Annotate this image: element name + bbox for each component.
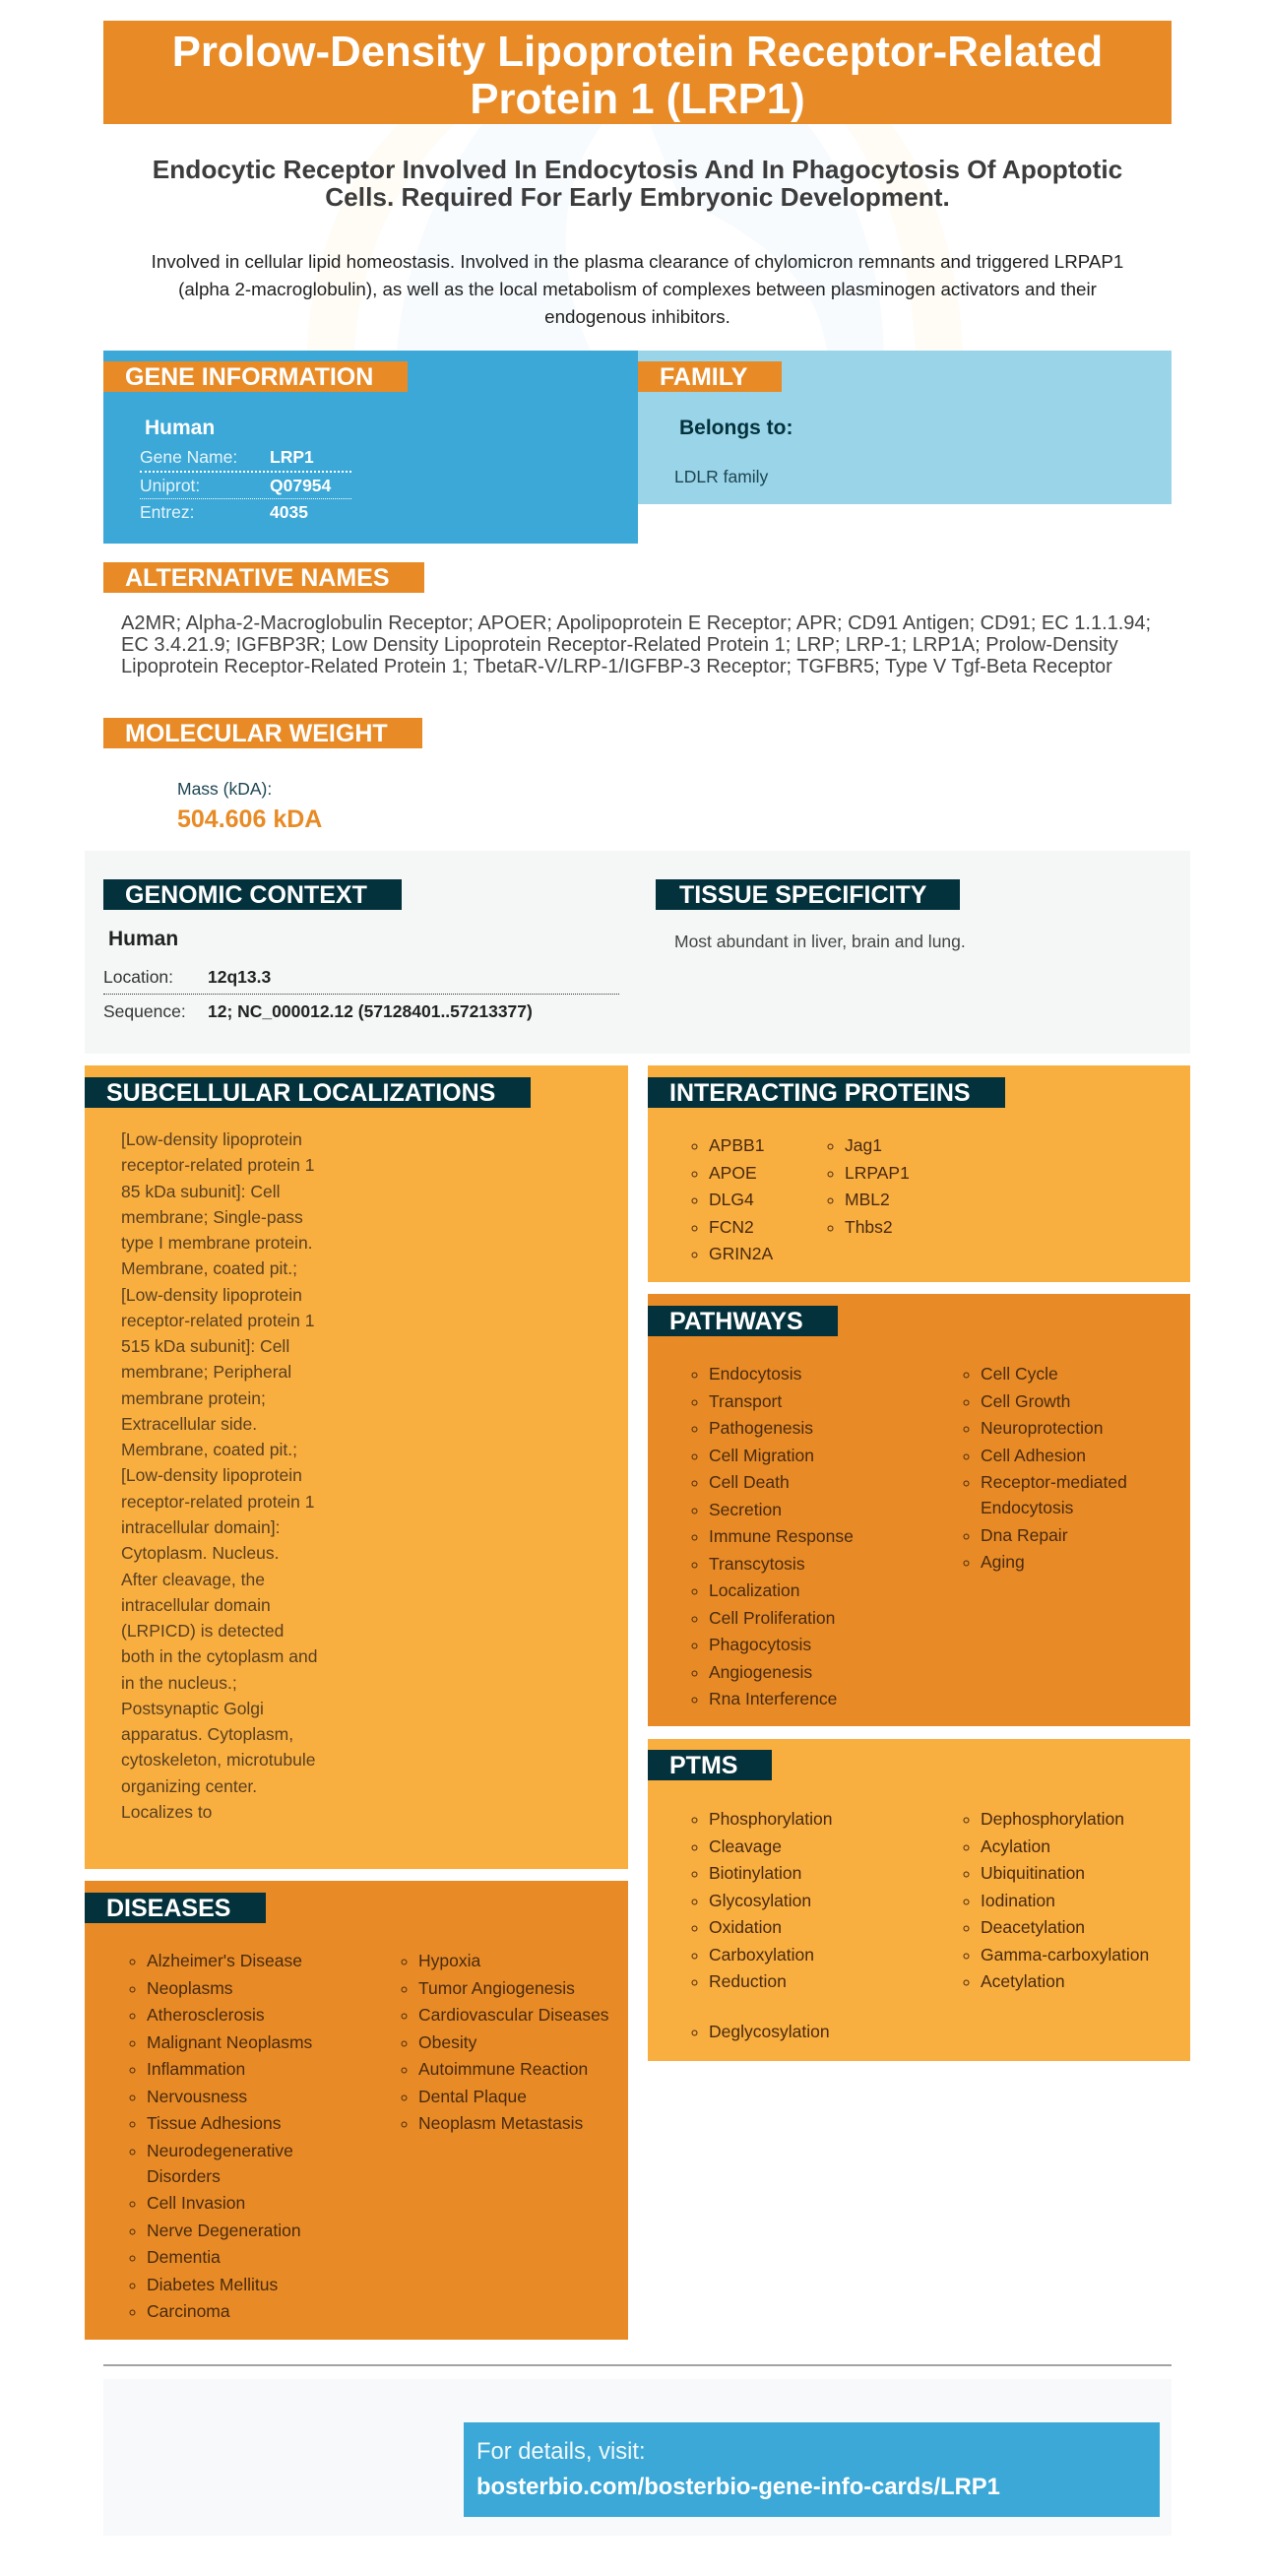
panel: pathways: [648, 1294, 1190, 1726]
pathway list column 1: Endocytosis: [709, 1364, 801, 1384]
protein list column 2: Thbs2: [845, 1217, 893, 1237]
localization text: Membrane, coated pit.;: [121, 1258, 297, 1278]
disease list column 1: Inflammation: [147, 2059, 245, 2079]
sequence value: 12; NC_000012.12 (57128401..57213377): [208, 1001, 533, 1021]
panel: genomic context and tissue specificity: [85, 851, 1190, 1054]
pathway list column 1: Secretion: [709, 1499, 782, 1518]
localization text: receptor-related protein 1: [121, 1155, 315, 1175]
ptm list column 1: Cleavage: [709, 1835, 782, 1855]
disease list column 1: Nervousness: [147, 2086, 247, 2105]
pathway list column 1: Localization: [709, 1580, 799, 1600]
pathway list column 2: Receptor-mediated: [981, 1472, 1127, 1492]
localization text: in the nucleus.;: [121, 1673, 237, 1693]
ptm list column 1: Reduction: [709, 1971, 787, 1991]
family value: LDLR family: [674, 467, 768, 486]
species label: Human: [145, 417, 215, 439]
species label: Human: [108, 928, 178, 950]
localization text: [Low-density lipoprotein: [121, 1285, 302, 1305]
ptm list column 2: Acetylation: [981, 1971, 1065, 1991]
disease list column 2: Obesity: [418, 2032, 476, 2052]
protein list column 2: MBL2: [845, 1190, 890, 1209]
description: Involved in cellular lipid homeostasis. Involved in the plasma clearance of chylomicron remnants and triggered LRPAP1: [152, 251, 1123, 272]
localization text: apparatus. Cytoplasm,: [121, 1724, 293, 1744]
alternative names text: [121, 612, 1151, 677]
localization text: membrane; Single-pass: [121, 1207, 303, 1227]
localization text: receptor-related protein 1: [121, 1311, 315, 1330]
pathway list column 1: Pathogenesis: [709, 1418, 813, 1438]
protein list column 2: Jag1: [845, 1135, 882, 1155]
ptm list column 1: Glycosylation: [709, 1891, 811, 1910]
entrez label: Entrez:: [140, 502, 194, 522]
localization text: intracellular domain: [121, 1595, 271, 1615]
subtitle: [153, 155, 1122, 212]
disease list column 2: Neoplasm Metastasis: [418, 2113, 583, 2133]
panel: interacting proteins: [648, 1065, 1190, 1282]
heading: ptms: [648, 1750, 772, 1780]
localization text: Localizes to: [121, 1802, 212, 1822]
panel: diseases: [85, 1881, 628, 2340]
localization text: organizing center.: [121, 1776, 257, 1796]
disease list column 1: Neoplasms: [147, 1977, 233, 1997]
title banner: Protein 1 (LRP1): [470, 75, 805, 123]
protein list column 2: [827, 1135, 910, 1237]
pathway list column 1: Immune Response: [709, 1526, 854, 1546]
ptm list column 1: Deglycosylation: [709, 2022, 830, 2041]
description: endogenous inhibitors.: [544, 306, 730, 327]
protein list column 1: DLG4: [709, 1190, 754, 1209]
disease list column 2: Cardiovascular Diseases: [418, 2005, 609, 2025]
alternative names text: A2MR; Alpha-2-Macroglobulin Receptor; APOER; Apolipoprotein E Receptor; APR; CD91 Antigen; CD91; EC 1.1.1.94;: [121, 612, 1151, 634]
heading: family: FAMILY: [660, 363, 747, 391]
disease list column 2: Hypoxia: [418, 1951, 480, 1970]
subtitle: Cells. Required For Early Embryonic Development.: [325, 182, 950, 212]
protein list column 1: APOE: [709, 1162, 757, 1182]
heading: pathways: PATHWAYS: [669, 1308, 803, 1335]
pathway list column 2: Aging: [981, 1552, 1025, 1572]
callout: details link: [464, 2422, 1160, 2517]
disease list column 1: Atherosclerosis: [147, 2005, 265, 2025]
protein list column 1: [691, 1135, 774, 1263]
localization text: Postsynaptic Golgi: [121, 1699, 264, 1718]
disease list column 2: [402, 1951, 609, 2133]
localization text: membrane protein;: [121, 1388, 266, 1408]
mass value: 504.606 kDA: [177, 805, 322, 833]
ptm list column 2: Ubiquitination: [981, 1863, 1085, 1883]
background watermark logo: [307, 124, 963, 351]
mass label: Mass (kDA):: [177, 779, 272, 799]
disease list column 2: Autoimmune Reaction: [418, 2059, 588, 2079]
ptm list column 1: Phosphorylation: [709, 1809, 833, 1829]
heading: molecular weight: MOLECULAR WEIGHT: [125, 720, 388, 747]
panel: family: [638, 351, 1172, 504]
entrez value: 4035: [270, 502, 308, 522]
ptm list column 2: Acylation: [981, 1835, 1050, 1855]
heading: diseases: DISEASES: [106, 1895, 230, 1922]
heading: pathways: [648, 1306, 838, 1335]
ptm list column 2: [963, 1809, 1149, 1991]
protein list column 1: APBB1: [709, 1135, 764, 1155]
ptm list column 2: Deacetylation: [981, 1917, 1085, 1937]
pathway list column 1: Cell Migration: [709, 1446, 814, 1465]
pathway list column 1: Cell Proliferation: [709, 1607, 835, 1627]
ptm list column 1: Carboxylation: [709, 1944, 814, 1964]
ptm list column 2: Dephosphorylation: [981, 1809, 1124, 1829]
heading: family: [638, 361, 782, 392]
pathway list column 1: Cell Death: [709, 1472, 790, 1492]
location value: 12q13.3: [208, 967, 271, 987]
description: [152, 251, 1123, 327]
disease list column 2: Dental Plaque: [418, 2086, 527, 2105]
localization text: Membrane, coated pit.;: [121, 1440, 297, 1459]
disease list column 1: Neurodegenerative: [147, 2141, 293, 2160]
localization text: [121, 1129, 317, 1822]
disease list column 1: Tissue Adhesions: [147, 2113, 282, 2133]
localization text: 515 kDa subunit]: Cell: [121, 1336, 289, 1356]
ptm list column 2: Iodination: [981, 1891, 1055, 1910]
callout url: bosterbio.com/bosterbio-gene-info-cards/LRP1: [476, 2474, 1000, 2500]
ptm list column 1: Oxidation: [709, 1917, 782, 1937]
localization text: both in the cytoplasm and: [121, 1646, 317, 1666]
pathway list column 1: Transcytosis: [709, 1554, 805, 1574]
localization text: membrane; Peripheral: [121, 1362, 291, 1382]
heading: ptms: PTMS: [669, 1752, 737, 1779]
title banner: [103, 21, 1172, 124]
heading: alternative names: ALTERNATIVE NAMES: [125, 564, 390, 592]
localization text: After cleavage, the: [121, 1570, 265, 1589]
localization text: 85 kDa subunit]: Cell: [121, 1182, 280, 1201]
gene name value: LRP1: [270, 447, 314, 467]
disease list column 1: Disorders: [147, 2166, 221, 2186]
pathway list column 2: Endocytosis: [981, 1498, 1073, 1517]
heading: subcellular localizations: SUBCELLULAR LOCALIZATIONS: [106, 1079, 495, 1107]
pathway list column 1: Transport: [709, 1390, 782, 1410]
pathway list column 1: [691, 1364, 854, 1708]
disease list column 1: Carcinoma: [147, 2301, 230, 2321]
ptm list column 1: [691, 1809, 833, 2041]
uniprot value: Q07954: [270, 476, 331, 495]
heading: genomic context: GENOMIC CONTEXT: [125, 881, 367, 909]
disease list column 1: Alzheimer's Disease: [147, 1951, 302, 1970]
panel: ptms: [648, 1739, 1190, 2061]
panel: footer: [103, 2379, 1172, 2536]
localization text: intracellular domain]:: [121, 1517, 280, 1537]
localization text: Cytoplasm. Nucleus.: [121, 1543, 279, 1563]
location label: Location:: [103, 967, 173, 987]
pathway list column 2: [963, 1364, 1127, 1572]
heading: diseases: [85, 1893, 266, 1922]
title banner: Prolow-Density Lipoprotein Receptor-Related: [172, 28, 1103, 76]
uniprot label: Uniprot:: [140, 476, 200, 495]
gene name label: Gene Name:: [140, 447, 237, 467]
tissue specificity text: Most abundant in liver, brain and lung.: [674, 932, 966, 951]
subtitle: Endocytic Receptor Involved In Endocytosis And In Phagocytosis Of Apoptotic: [153, 155, 1122, 184]
localization text: receptor-related protein 1: [121, 1492, 315, 1512]
sequence label: Sequence:: [103, 1001, 186, 1021]
localization text: (LRPICD) is detected: [121, 1621, 284, 1641]
disease list column 1: Diabetes Mellitus: [147, 2275, 278, 2294]
disease list column 1: Cell Invasion: [147, 2193, 245, 2213]
ptm list column 1: Biotinylation: [709, 1863, 801, 1883]
localization text: Extracellular side.: [121, 1414, 257, 1434]
alternative names text: Lipoprotein Receptor-Related Protein 1; TbetaR-V/LRP-1/IGFBP-3 Receptor; TGFBR5; Type V Tgf-Beta Receptor: [121, 656, 1112, 677]
heading: gene information: GENE INFORMATION: [125, 363, 373, 391]
panel: gene information: [103, 351, 638, 544]
disease list column 1: Malignant Neoplasms: [147, 2032, 312, 2052]
pathway list column 1: Rna Interference: [709, 1689, 837, 1708]
localization text: type I membrane protein.: [121, 1233, 313, 1253]
pathway list column 2: Cell Growth: [981, 1390, 1070, 1410]
localization text: [Low-density lipoprotein: [121, 1129, 302, 1149]
pathway list column 2: Dna Repair: [981, 1525, 1068, 1545]
ptm list column 2: Gamma-carboxylation: [981, 1944, 1149, 1964]
alternative names text: EC 3.4.21.9; IGFBP3R; Low Density Lipoprotein Receptor-Related Protein 1; LRP; LRP-1; LRP1A; Prolow-Density: [121, 634, 1118, 656]
disease list column 1: [130, 1951, 312, 2321]
pathway list column 2: Cell Adhesion: [981, 1446, 1086, 1465]
disease list column 1: Dementia: [147, 2247, 221, 2267]
heading: tissue specificity: TISSUE SPECIFICITY: [679, 881, 926, 909]
panel: subcellular localizations: [85, 1065, 628, 1869]
pathway list column 2: Neuroprotection: [981, 1418, 1104, 1438]
disease list column 2: Tumor Angiogenesis: [418, 1977, 575, 1997]
description: (alpha 2-macroglobulin), as well as the local metabolism of complexes between plasminogen activators and their: [178, 279, 1097, 299]
localization text: cytoskeleton, microtubule: [121, 1750, 315, 1770]
pathway list column 2: Cell Cycle: [981, 1364, 1058, 1384]
belongs to label: Belongs to:: [679, 417, 793, 439]
protein list column 2: LRPAP1: [845, 1162, 910, 1182]
protein list column 1: FCN2: [709, 1217, 754, 1237]
protein list column 1: GRIN2A: [709, 1244, 773, 1263]
heading: interacting proteins: INTERACTING PROTEINS: [669, 1079, 971, 1107]
disease list column 1: Nerve Degeneration: [147, 2221, 301, 2240]
localization text: [Low-density lipoprotein: [121, 1465, 302, 1485]
callout label: For details, visit:: [476, 2438, 646, 2465]
pathway list column 1: Angiogenesis: [709, 1662, 812, 1682]
pathway list column 1: Phagocytosis: [709, 1635, 811, 1654]
